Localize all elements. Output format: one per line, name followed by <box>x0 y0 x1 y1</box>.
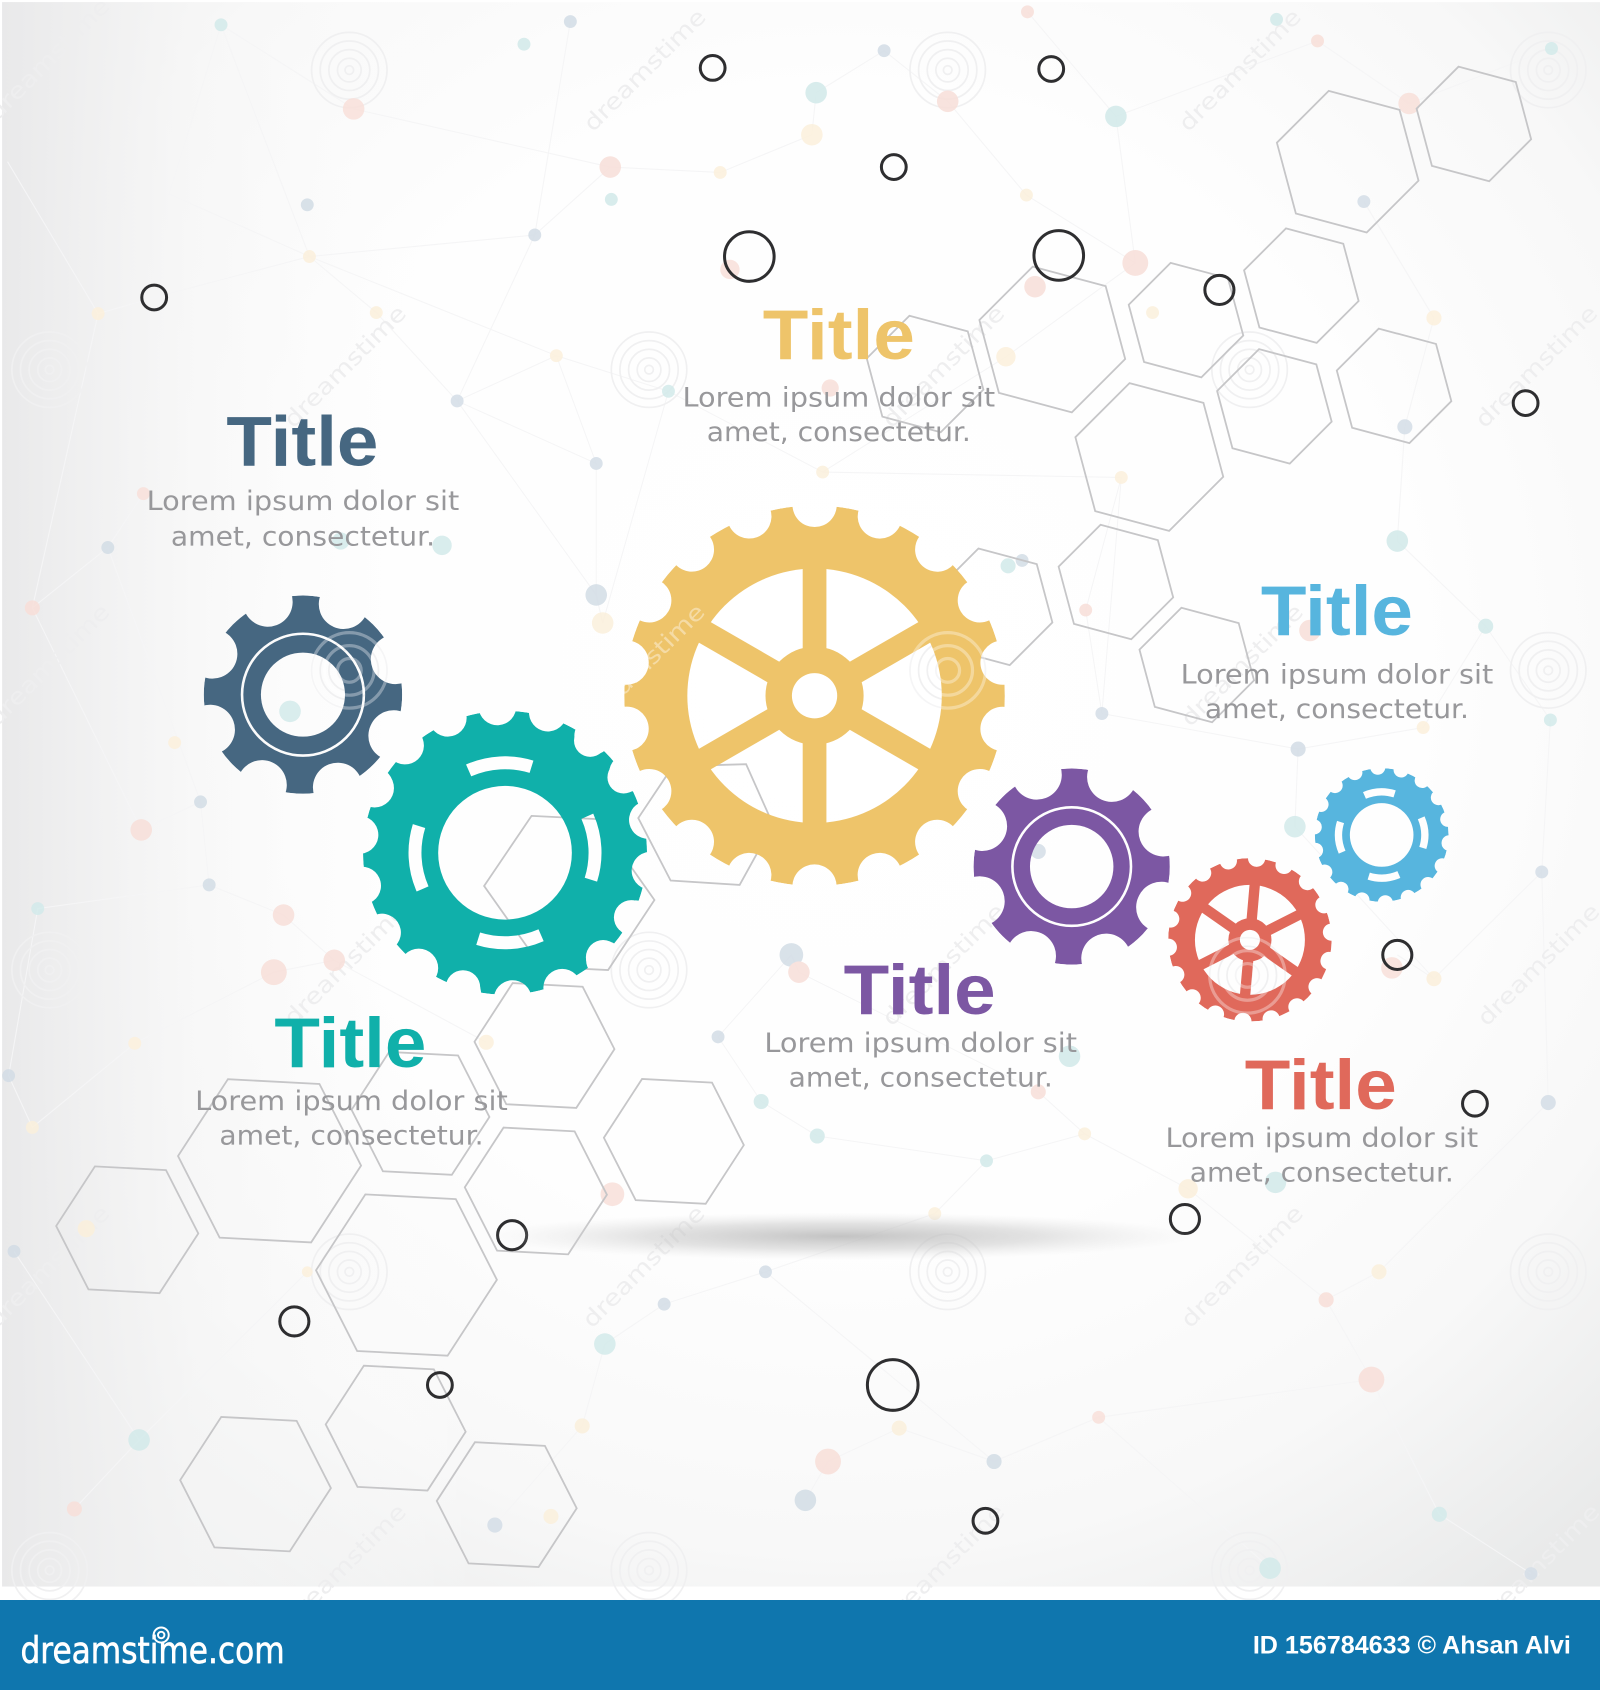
body: purple text: amet, consectetur. <box>789 1062 1053 1093</box>
body: red text <box>1165 1123 1478 1188</box>
body: yellow text <box>682 382 995 448</box>
icon: dark blue gear <box>204 595 402 794</box>
watermark text: dreamstime <box>1174 4 1307 137</box>
watermark text: dreamstime <box>877 1499 1010 1632</box>
watermark text: dreamstime <box>279 899 412 1031</box>
icon: purple gear <box>974 768 1170 965</box>
icon: yellow gear <box>624 505 1005 886</box>
watermark text: dreamstime <box>578 1201 710 1333</box>
body: purple text <box>764 1028 1077 1093</box>
body: yellow text: amet, consectetur. <box>707 417 971 448</box>
footer credit: ID 156784633 © Ahsan Alvi <box>1253 1632 1571 1659</box>
text block: dark blue <box>147 403 459 552</box>
watermark text: dreamstime <box>877 899 1010 1031</box>
watermark text: dreamstime <box>877 301 1010 433</box>
watermark text: dreamstime <box>279 301 412 433</box>
watermark text: dreamstime <box>1176 1201 1309 1333</box>
body: dark blue text: amet, consectetur. <box>171 521 435 552</box>
body: purple text: Lorem ipsum dolor sit <box>764 1028 1077 1059</box>
watermark text: dreamstime <box>579 4 712 137</box>
text block: teal <box>195 1004 508 1152</box>
text block: red <box>1165 1046 1478 1188</box>
heading: red title: Title <box>1245 1046 1397 1124</box>
watermark text: dreamstime <box>1473 899 1600 1031</box>
body: teal text: Lorem ipsum dolor sit <box>195 1086 508 1117</box>
heading: purple title: Title <box>844 951 996 1029</box>
footer bar <box>0 1600 1600 1690</box>
body: blue text: Lorem ipsum dolor sit <box>1181 659 1493 690</box>
watermark text: dreamstime <box>1176 599 1309 732</box>
hexagon cluster: centre and lower left <box>53 764 773 1569</box>
watermark text: dreamstime <box>279 1499 412 1632</box>
body: yellow text: Lorem ipsum dolor sit <box>682 382 995 413</box>
body: teal text <box>195 1086 508 1152</box>
icon: blue gear <box>1315 768 1449 902</box>
watermark text: dreamstime <box>1473 1499 1600 1632</box>
watermark text: dreamstime <box>1470 301 1600 433</box>
body: teal text: amet, consectetur. <box>219 1121 484 1152</box>
watermark overlay on gears <box>312 599 1285 1013</box>
heading: dark blue title: Title <box>226 403 378 481</box>
body: blue text <box>1181 659 1493 725</box>
small open rings <box>142 56 1538 1533</box>
icon: spiral logo <box>154 1627 169 1643</box>
icon: teal gear <box>363 711 647 995</box>
heading: yellow title: Title <box>763 296 915 374</box>
watermark overlay on gears: dreamstime <box>578 599 710 732</box>
body: red text: amet, consectetur. <box>1190 1157 1454 1188</box>
hexagon cluster: top right <box>853 59 1544 730</box>
body: blue text: amet, consectetur. <box>1205 694 1469 725</box>
heading: teal title: Title <box>274 1004 426 1082</box>
text block: purple <box>764 951 1077 1093</box>
body: dark blue text: Lorem ipsum dolor sit <box>147 486 459 517</box>
footer logo: dreamstime.com <box>20 1629 285 1672</box>
body: dark blue text <box>147 486 459 552</box>
body: red text: Lorem ipsum dolor sit <box>1165 1123 1478 1154</box>
heading: blue title: Title <box>1261 572 1413 650</box>
ground shadow <box>485 1213 1197 1260</box>
text block: blue <box>1181 572 1493 725</box>
text block: yellow <box>682 296 995 448</box>
icon: red gear <box>1168 858 1332 1022</box>
